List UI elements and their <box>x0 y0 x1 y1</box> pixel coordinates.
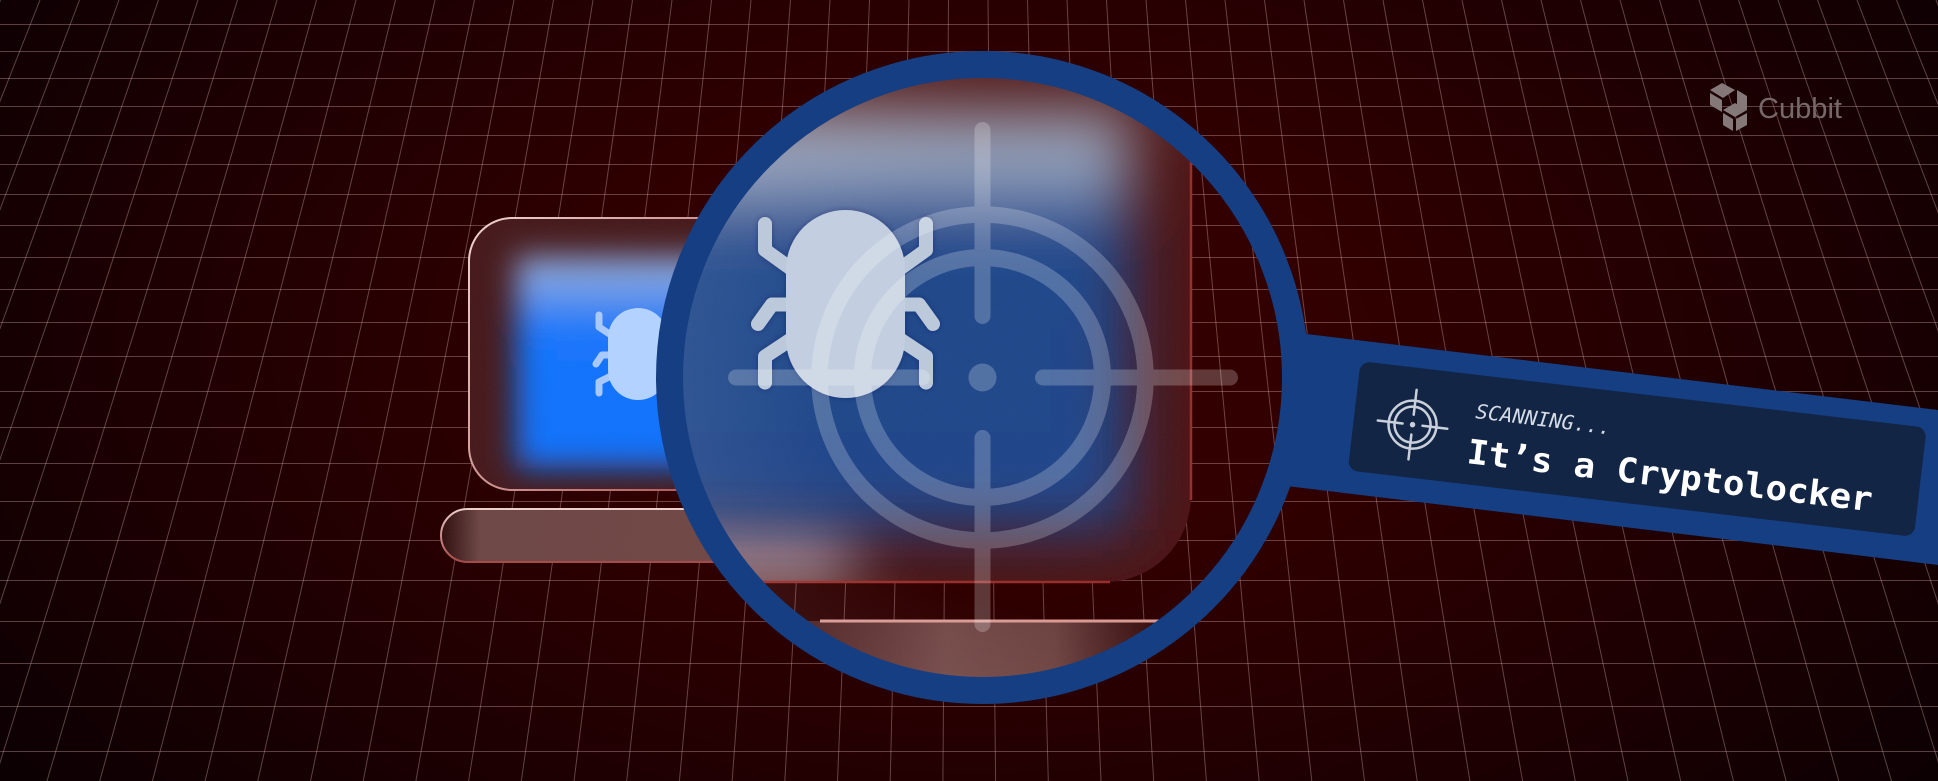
icon: small bug <box>596 308 668 400</box>
icon: magnified bug <box>758 210 933 398</box>
handle label panel <box>1348 361 1927 537</box>
icon: panel crosshair <box>1374 386 1451 463</box>
lens glass sheen <box>683 80 945 668</box>
logo wordmark: Cubbit <box>1758 93 1842 125</box>
magnifier lens contents <box>683 78 1282 677</box>
lens backdrop <box>794 164 1282 620</box>
logo: Cubbit <box>1710 83 1842 131</box>
crosshair target <box>736 130 1230 624</box>
magnifier handle <box>1270 332 1938 565</box>
laptop screen (unmagnified) <box>468 217 698 491</box>
magnified laptop base <box>808 620 1159 677</box>
laptop base (unmagnified) <box>440 508 714 563</box>
magnified laptop screen <box>683 78 1192 584</box>
magnifier ring <box>670 64 1296 690</box>
label: scanning: SCANNING... <box>1474 399 1612 440</box>
icon: Cubbit cubes <box>1710 83 1747 131</box>
label: result: It’s a Cryptolocker <box>1465 432 1875 520</box>
